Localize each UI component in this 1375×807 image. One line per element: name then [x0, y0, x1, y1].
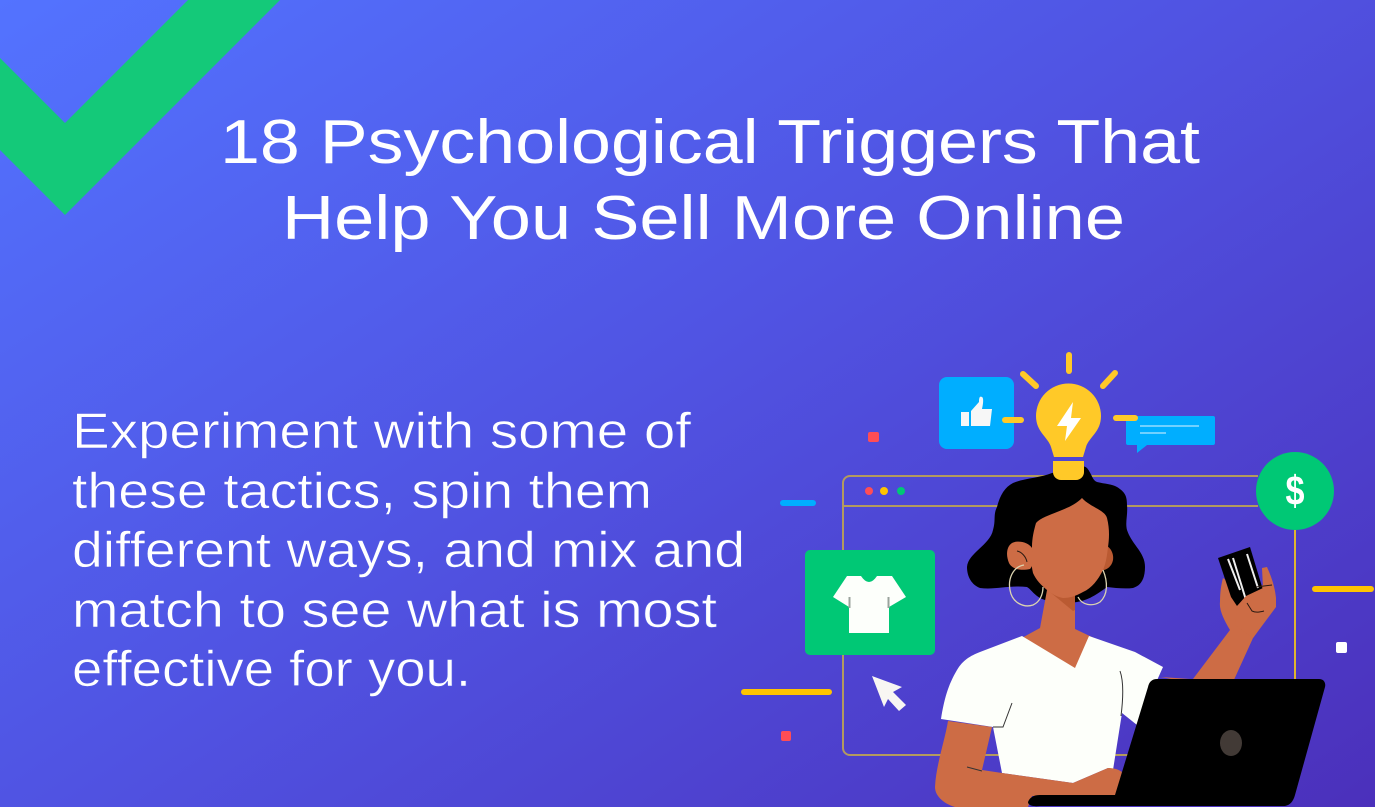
white t-shirt [941, 636, 1163, 783]
icon: green check mark [0, 0, 280, 215]
text block: advice paragraph: effective for you. [72, 641, 471, 697]
woman figure [935, 466, 1325, 807]
icon: chat bubble [1126, 416, 1215, 453]
title: Help You Sell More Online [282, 184, 1125, 253]
text block: advice paragraph: match to see what is most [72, 582, 717, 638]
raised arm and hand [1161, 578, 1276, 682]
earrings [1010, 565, 1106, 606]
title: 18 Psychological Triggers That [220, 108, 1200, 177]
text block: advice paragraph: different ways, and mix and [72, 522, 745, 578]
icon: thumbs up [939, 377, 1014, 449]
neck [1018, 590, 1094, 672]
credit card [1218, 547, 1263, 606]
text block: advice paragraph: these tactics, spin them [72, 463, 652, 519]
decorative dashes and squares [741, 432, 1374, 741]
text block: advice paragraph [72, 403, 745, 697]
title [220, 108, 1200, 253]
illustration: online shopper with ideas [741, 355, 1374, 807]
icon: dollar coin: $ [1286, 467, 1304, 514]
icon: mouse cursor [872, 676, 906, 711]
icon: dollar coin [1256, 452, 1334, 530]
browser window outline [843, 476, 1295, 755]
right ear [1103, 545, 1113, 570]
icon: t-shirt card [805, 550, 935, 655]
lower arm [935, 721, 1122, 807]
text block: advice paragraph: Experiment with some of [72, 403, 691, 459]
browser window dots [865, 487, 905, 495]
hand fingers [1235, 567, 1276, 638]
laptop [1028, 679, 1325, 806]
left ear [1007, 542, 1033, 570]
hair [967, 466, 1145, 603]
face [1031, 498, 1109, 598]
icon: light bulb [1005, 355, 1135, 480]
